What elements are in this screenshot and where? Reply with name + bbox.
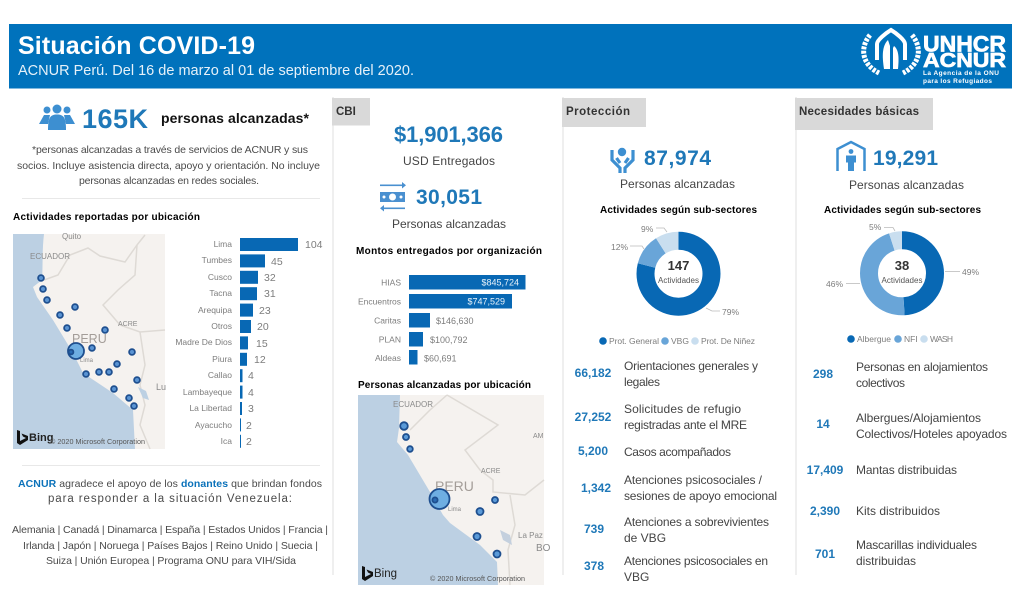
list item: 701	[815, 547, 835, 561]
list item	[575, 402, 747, 432]
chart legend	[599, 336, 755, 346]
map: people by location	[358, 395, 551, 585]
logo: UNHCR ACNUR	[864, 30, 1007, 85]
bar chart: montos: PLAN	[379, 334, 401, 344]
big number: people: 30,051	[416, 186, 482, 209]
bing logo	[362, 566, 397, 581]
donut chart	[826, 222, 979, 306]
bar chart: montos: $146,630	[436, 316, 474, 326]
list item	[575, 359, 758, 389]
list item: 1,342	[581, 481, 611, 495]
list item: Albergues/Alojamientos	[856, 411, 981, 425]
map: activities by location: Lima	[80, 358, 94, 364]
bar chart: montos	[358, 275, 526, 364]
donut chart: Actividades	[658, 276, 699, 285]
chart legend: VBG	[671, 336, 689, 346]
icon: person in shelter	[838, 142, 864, 171]
donut chart: 147	[668, 258, 689, 273]
map: people by location: ACRE	[481, 468, 501, 475]
bar chart: actividades por ubicación: La Libertad	[189, 403, 232, 413]
donut chart: 9%	[641, 224, 654, 234]
map copyright: © 2020 Microsoft Corporation	[430, 574, 525, 583]
chart title: Actividades según sub-sectores	[600, 205, 757, 216]
bar chart: actividades por ubicación: 4	[248, 387, 254, 399]
footnote: *personas alcanzadas a través de servicios de ACNUR y sus	[32, 144, 308, 156]
list item: Mascarillas individuales	[856, 538, 977, 552]
list item: Mantas distribuidas	[856, 463, 957, 477]
bar chart: actividades por ubicación: 2	[246, 436, 252, 448]
bar chart: montos: $845,724	[481, 278, 519, 288]
list item: Atenciones psicosociales en	[624, 554, 768, 568]
bar chart: actividades por ubicación: 20	[257, 321, 269, 333]
list item: Kits distribuidos	[856, 504, 940, 518]
panel: Protección	[562, 98, 777, 584]
text block: donors: para responder a la situación Venezuela:	[48, 493, 292, 505]
list item: 17,409	[807, 463, 844, 477]
list item	[584, 554, 768, 584]
list item: distribuidas	[856, 554, 916, 568]
heading: personas alcanzadas*	[161, 110, 310, 126]
list item: registradas ante el MRE	[624, 418, 747, 432]
text block: donors: Alemania | Canadá | Dinamarca | España | Estados Unidos | Francia |	[12, 524, 328, 536]
map: people by location: BO	[536, 543, 551, 554]
list item: 2,390	[810, 504, 840, 518]
list item: legales	[624, 375, 660, 389]
heading tab: Protección	[566, 106, 630, 118]
panel: CBI	[332, 98, 551, 585]
list item: 66,182	[575, 366, 612, 380]
heading tab	[332, 98, 370, 126]
icon: people group	[39, 104, 75, 130]
chart legend: Prot. General	[609, 336, 659, 346]
list item	[807, 463, 957, 477]
list item: Atenciones a sobrevivientes	[624, 515, 769, 529]
list item: Solicitudes de refugio	[624, 402, 741, 416]
bar chart: actividades por ubicación: Madre De Dios	[175, 337, 232, 347]
title: Situación COVID-19	[18, 32, 255, 60]
bar chart: actividades por ubicación: Callao	[208, 370, 232, 380]
bar chart: actividades por ubicación: 31	[264, 288, 276, 300]
map: activities by location: Quito	[62, 232, 82, 241]
chart legend: WASH	[930, 334, 953, 344]
list item: 5,200	[578, 444, 608, 458]
list item	[813, 360, 988, 390]
bar chart: actividades por ubicación: Ayacucho	[195, 420, 232, 430]
map: people by location: La Paz	[518, 531, 543, 540]
chart legend: Albergue	[857, 334, 891, 344]
bar chart: actividades por ubicación	[175, 238, 323, 448]
bar chart: montos: Encuentros	[358, 296, 401, 306]
list item	[815, 538, 977, 568]
list item: sesiones de apoyo emocional	[624, 489, 777, 503]
bar chart: actividades por ubicación: 2	[246, 420, 252, 432]
heading tab: CBI	[336, 106, 356, 118]
bar chart: actividades por ubicación: 45	[271, 256, 283, 268]
big number: 165K	[82, 104, 148, 134]
caption: Personas alcanzadas	[392, 217, 506, 231]
heading tab: Necesidades básicas	[799, 106, 919, 118]
list item	[584, 515, 769, 545]
list item: 739	[584, 522, 604, 536]
chart title: Actividades según sub-sectores	[824, 205, 981, 216]
donut chart: 5%	[869, 222, 882, 232]
bar chart: actividades por ubicación: 23	[259, 305, 271, 317]
donut chart	[611, 224, 739, 317]
chart title: Montos entregados por organización	[356, 246, 542, 257]
list item: de VBG	[624, 531, 666, 545]
logo wordmark: UNHCR	[923, 32, 1006, 56]
list item: 378	[584, 559, 604, 573]
footnote: personas alcanzadas en redes sociales.	[79, 175, 259, 187]
list item	[810, 504, 940, 518]
text block: donors: Suiza | Unión Europea | Programa ONU para VIH/Sida	[46, 555, 296, 567]
bar chart: montos: HIAS	[381, 278, 401, 288]
bar chart: montos: Caritas	[374, 316, 401, 326]
map: people by location: AM	[533, 433, 544, 440]
map: activities by location	[13, 232, 166, 449]
bing logo	[17, 430, 53, 445]
bar chart: actividades por ubicación: Tumbes	[202, 255, 232, 265]
bar chart: actividades por ubicación: 32	[264, 272, 276, 284]
list item: Personas en alojamientos	[856, 360, 988, 374]
bar chart: montos: $747,529	[467, 296, 505, 306]
bar chart: actividades por ubicación: 104	[305, 239, 323, 251]
list item: Orientaciones generales y	[624, 359, 758, 373]
list item: Colectivos/Hoteles apoyados	[856, 427, 1007, 441]
list item	[816, 411, 1007, 441]
map: activities by location: ECUADOR	[30, 252, 70, 261]
map: people by location: Lima	[448, 507, 462, 513]
map: people by location: ECUADOR	[393, 400, 433, 409]
list item: colectivos	[856, 376, 905, 390]
list item: Casos acompañados	[624, 445, 731, 459]
text block: donors	[12, 478, 328, 567]
chart title: Personas alcanzadas por ubicación	[358, 380, 531, 391]
list item	[581, 473, 777, 503]
bar chart: actividades por ubicación: 3	[248, 403, 254, 415]
list item	[578, 444, 731, 459]
bing logo: Bing	[29, 432, 53, 444]
logo: UNHCR ACNUR: para los Refugiados	[923, 78, 992, 85]
activity list	[807, 360, 1007, 568]
map: activities by location: PERU	[72, 332, 107, 346]
list item: 27,252	[575, 410, 612, 424]
bar chart: actividades por ubicación: 12	[254, 354, 266, 366]
activity list	[575, 359, 777, 584]
map bubbles	[400, 422, 500, 558]
donut chart: 46%	[826, 279, 843, 289]
bing logo: Bing	[374, 568, 397, 580]
text block: donors: ACNUR agradece el apoyo de los donantes que brindan fondos	[18, 478, 322, 490]
icon: cash	[380, 182, 406, 212]
big number: USD: $1,901,366	[394, 122, 503, 147]
logo: UNHCR ACNUR: La Agencia de la ONU	[923, 70, 999, 77]
header banner	[9, 24, 1012, 88]
bar chart: actividades por ubicación: Lima	[214, 239, 232, 249]
caption: Personas alcanzadas	[849, 178, 964, 192]
donut chart: Actividades	[882, 276, 922, 285]
list item: 14	[816, 417, 830, 431]
bar chart: actividades por ubicación: 15	[256, 338, 268, 350]
big number: 87,974	[644, 147, 711, 170]
heading tab	[562, 98, 646, 127]
list item: VBG	[624, 570, 649, 584]
big number: 19,291	[873, 147, 938, 170]
bar chart: actividades por ubicación: Cusco	[208, 272, 232, 282]
bar chart: montos: $60,691	[424, 354, 457, 364]
bar chart: actividades por ubicación: Otros	[211, 321, 232, 331]
bar chart: actividades por ubicación: Arequipa	[198, 305, 232, 315]
map: people by location: PERU	[435, 478, 474, 494]
map copyright: © 2020 Microsoft Corporation	[50, 437, 145, 446]
chart legend	[847, 334, 953, 344]
list item: 298	[813, 367, 833, 381]
footnote	[17, 144, 320, 187]
donut chart: 12%	[611, 242, 628, 252]
panel: total reach	[17, 104, 320, 187]
logo: UNHCR ACNUR: ACNUR	[923, 50, 1007, 72]
map bubbles	[38, 275, 140, 409]
icon: protecting hands	[612, 148, 633, 173]
bar chart: actividades por ubicación: Piura	[212, 354, 232, 364]
donut chart: 38	[895, 258, 909, 273]
heading: actividades por ubicación: Actividades reportadas por ubicación	[13, 212, 200, 223]
icon: wreath and shelter	[864, 30, 918, 73]
donut chart: 49%	[962, 267, 979, 277]
heading tab	[795, 98, 933, 130]
panel: Necesidades básicas	[795, 98, 1007, 568]
subtitle: ACNUR Perú. Del 16 de marzo al 01 de septiembre del 2020.	[18, 63, 414, 79]
footnote: socios. Incluye asistencia directa, apoyo y orientación. No incluye	[17, 160, 320, 172]
map: activities by location: Lu	[156, 382, 166, 392]
caption: USD Entregados	[403, 154, 495, 168]
text block: donors: Irlanda | Japón | Noruega | Países Bajos | Reino Unido | Suecia |	[23, 540, 318, 552]
bar chart: actividades por ubicación: Ica	[221, 436, 232, 446]
bar chart: actividades por ubicación: Tacna	[209, 288, 232, 298]
caption: Personas alcanzadas	[620, 177, 735, 191]
bar chart: actividades por ubicación: Lambayeque	[183, 387, 232, 397]
list item: Atenciones psicosociales /	[624, 473, 763, 487]
chart legend: NFI	[904, 334, 918, 344]
bar chart: actividades por ubicación: 4	[248, 370, 254, 382]
donut chart: 79%	[722, 307, 739, 317]
bar chart: montos: Aldeas	[375, 353, 401, 363]
map: activities by location: ACRE	[118, 321, 138, 328]
chart legend: Prot. De Niñez	[701, 336, 755, 346]
bar chart: montos: $100,792	[430, 335, 468, 345]
